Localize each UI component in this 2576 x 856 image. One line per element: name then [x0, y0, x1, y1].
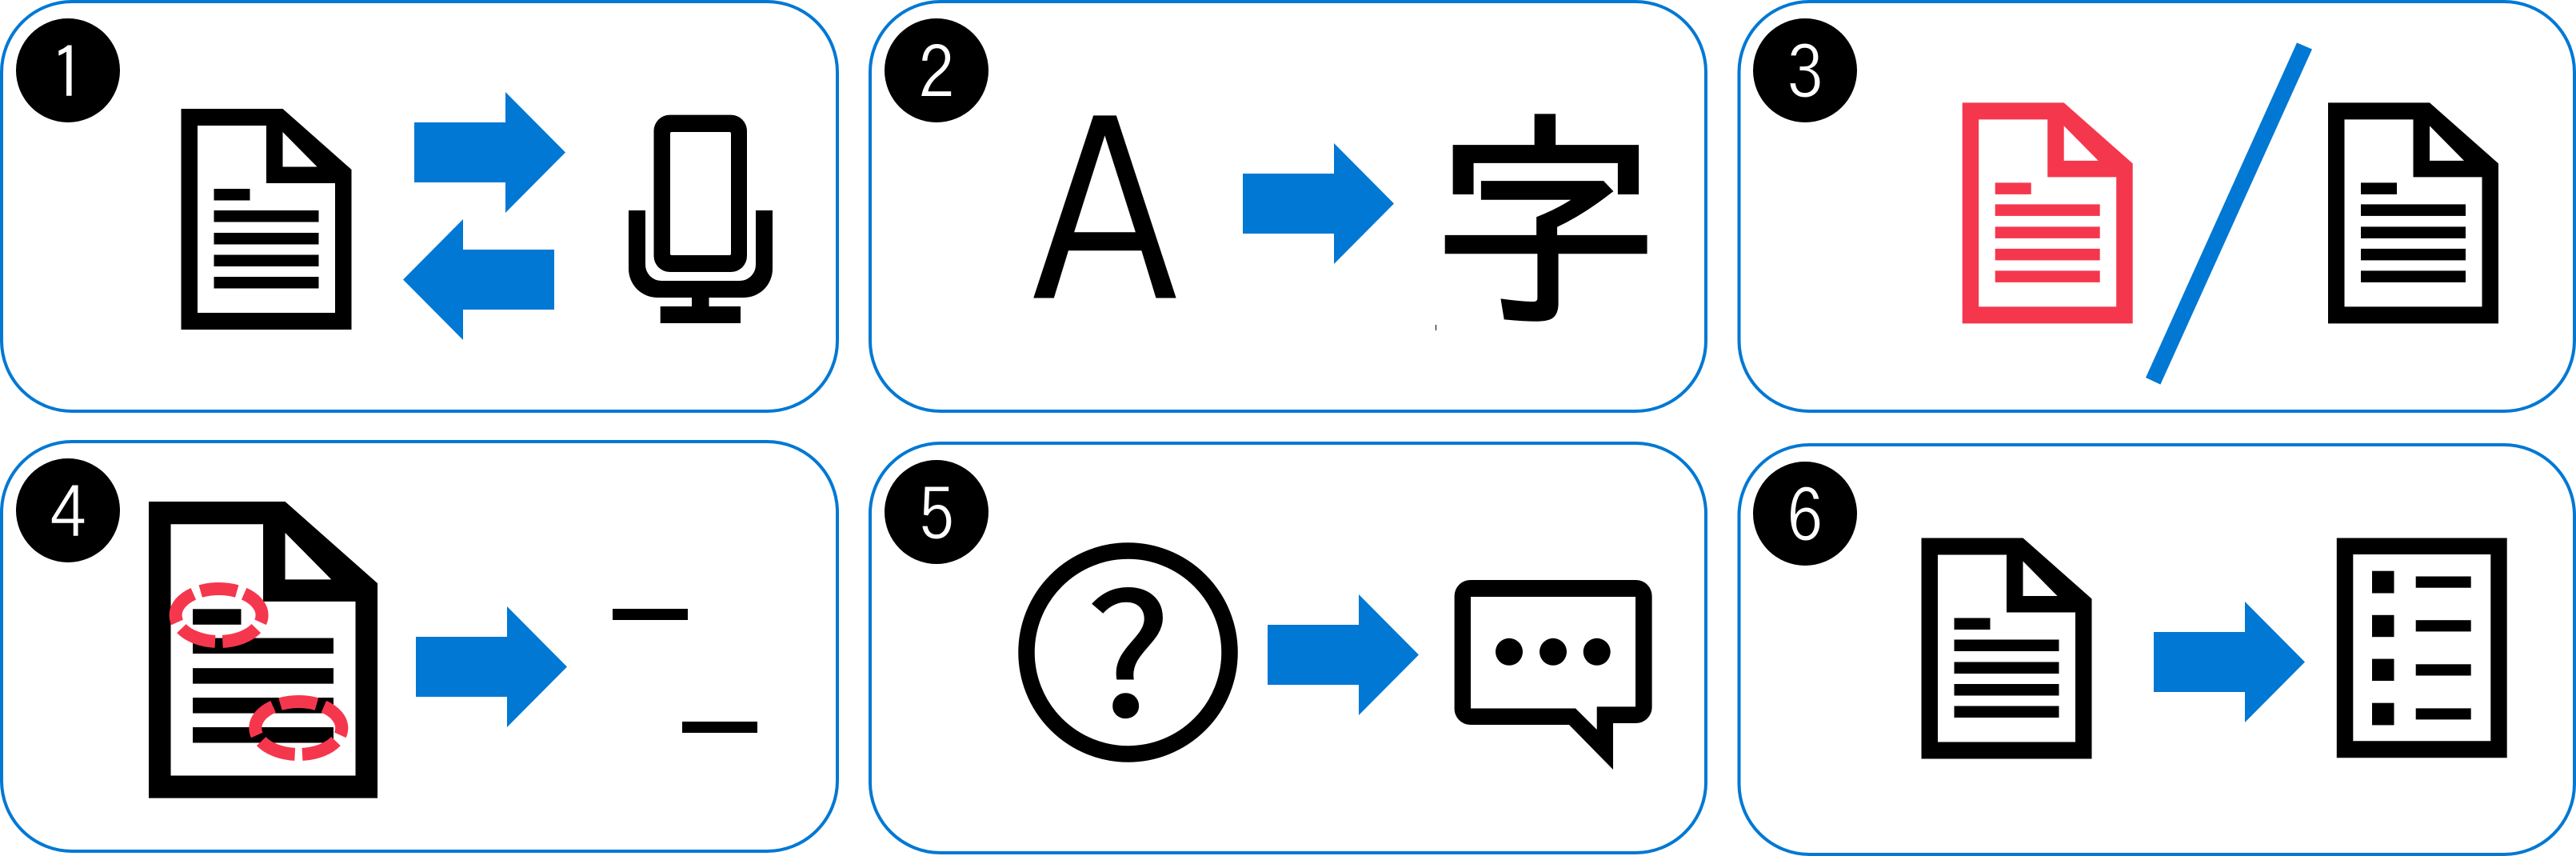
dashed highlight ring bottom: [255, 702, 341, 754]
number badge 1: [16, 18, 120, 122]
icon: document: [1921, 538, 2092, 758]
number badge 5: [885, 460, 988, 564]
panel 6 border: [1739, 445, 2574, 854]
panel 4: extract passages: [2, 442, 837, 851]
slash divider: [2146, 42, 2312, 385]
icon: red document: [1963, 102, 2133, 323]
icon: speech bubble: [1455, 580, 1652, 770]
number badge 6: [1753, 462, 1857, 566]
icon: question mark in circle: [1027, 523, 1230, 764]
number badge 2: [885, 18, 988, 122]
number badge 4: 4: [50, 476, 86, 550]
arrow: right: [416, 606, 567, 727]
panel 2 border: [870, 2, 1706, 411]
panel 5: question and answer: [870, 443, 1706, 853]
arrow: left: [403, 219, 554, 340]
arrow: right: [1243, 143, 1394, 264]
panel 1: document and speech: [2, 2, 837, 411]
number badge 5: 5: [918, 478, 955, 551]
number badge 6: 6: [1787, 479, 1823, 553]
extracted line top: [613, 609, 688, 620]
arrow: right: [1268, 594, 1419, 715]
extracted line bottom: [682, 722, 757, 733]
panel 2: translation: [870, 2, 1706, 411]
icon: black document: [2328, 102, 2498, 323]
panel 1 border: [2, 2, 837, 411]
large document: [149, 502, 377, 798]
dashed highlight ring top: [176, 589, 262, 642]
panel 6: summarize to list: [1739, 445, 2574, 854]
letter A: A: [1030, 64, 1180, 359]
panel 3 border: [1739, 2, 2574, 411]
icon: document: [181, 109, 352, 330]
icon: bullet list page: [2337, 538, 2507, 758]
panel 3: red or black document: [1739, 2, 2574, 411]
icon: question mark in circle: ?: [1086, 523, 1171, 764]
number badge 2: 2: [918, 36, 955, 110]
arrow: right: [2154, 602, 2305, 722]
number badge 3: 3: [1787, 36, 1823, 110]
panel 5 border: [870, 443, 1706, 853]
arrow: right: [414, 92, 565, 213]
number badge 3: [1753, 18, 1857, 122]
number badge 4: [16, 458, 120, 562]
CJK character: 字: [1433, 99, 1659, 351]
panel 4 border: [2, 442, 837, 851]
icon: microphone: [629, 115, 773, 323]
number badge 1: 1: [50, 36, 86, 110]
icon: document with highlights: [149, 502, 377, 798]
